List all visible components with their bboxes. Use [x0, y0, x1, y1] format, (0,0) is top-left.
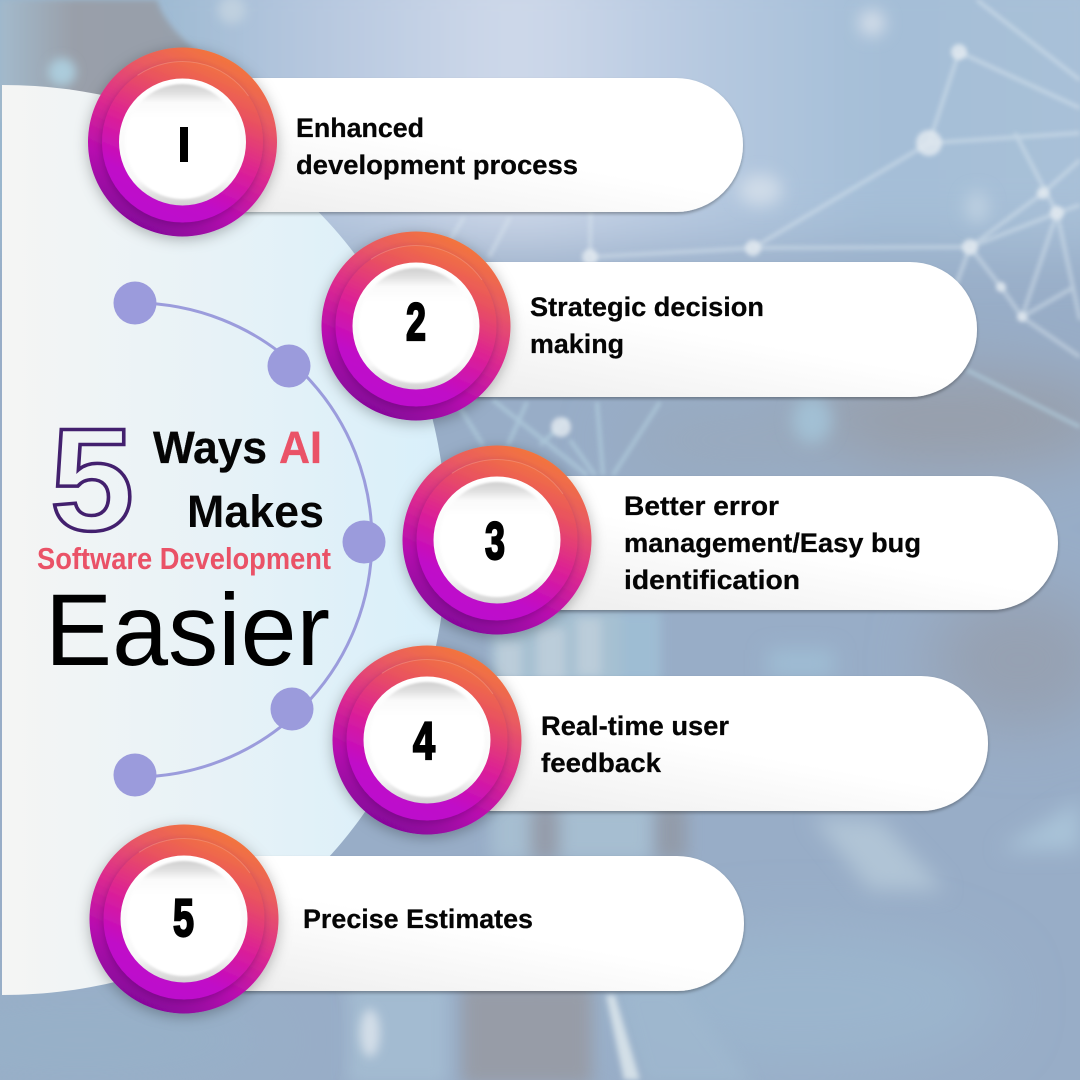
label 3: management/Easy bug — [624, 528, 921, 558]
badge 1 — [88, 48, 277, 236]
label 4 — [541, 711, 729, 778]
network lines — [450, 0, 1080, 357]
robot hand silhouette — [348, 805, 755, 1080]
left semicircle panel — [2, 85, 447, 995]
pill 4 — [425, 676, 988, 811]
heading: Easier: Easier — [45, 573, 330, 687]
label 3: Better error — [624, 491, 780, 521]
heading: Makes: Makes — [187, 486, 324, 537]
network nodes — [551, 44, 1064, 437]
badge 2: 2 — [406, 293, 426, 352]
heading: Ways AI: AI — [279, 422, 322, 473]
heading: Ways AI: Ways — [153, 422, 267, 473]
item 2 — [322, 232, 977, 420]
top-left grey shape — [0, 0, 250, 120]
title block — [37, 398, 331, 687]
badge 5: 5 — [173, 889, 194, 948]
label 2 — [530, 292, 764, 359]
outlined numeral 5: 5 — [50, 398, 134, 561]
pill 3 — [495, 476, 1058, 610]
label 2: making — [530, 329, 624, 359]
label 3: identification — [624, 565, 800, 595]
pill 1 — [180, 78, 743, 212]
badge 3 — [402, 446, 592, 634]
item 3 — [402, 446, 1058, 634]
badge 1: 1 — [168, 106, 196, 176]
pill 5 — [181, 856, 744, 991]
badge 2 — [322, 232, 510, 420]
badge 5 — [90, 824, 278, 1014]
decorative arc with dots — [114, 282, 386, 796]
label 4: feedback — [541, 748, 662, 778]
item 5 — [90, 824, 744, 1014]
pill 2 — [414, 262, 977, 397]
label 3 — [624, 491, 921, 595]
label 5: Precise Estimates — [303, 904, 533, 934]
badge 4: 4 — [413, 712, 435, 771]
badge 4 — [332, 646, 522, 834]
label 1 — [296, 113, 578, 180]
item 1 — [88, 48, 743, 236]
soft highlights lower right — [768, 650, 1080, 890]
item 4 — [332, 646, 988, 834]
badge 3: 3 — [485, 512, 505, 571]
label 4: Real-time user — [541, 711, 729, 741]
label 2: Strategic decision — [530, 292, 764, 322]
label 1: Enhanced — [296, 113, 424, 143]
heading: Software Development: Software Development — [37, 541, 331, 576]
label 1: development process — [296, 150, 578, 180]
